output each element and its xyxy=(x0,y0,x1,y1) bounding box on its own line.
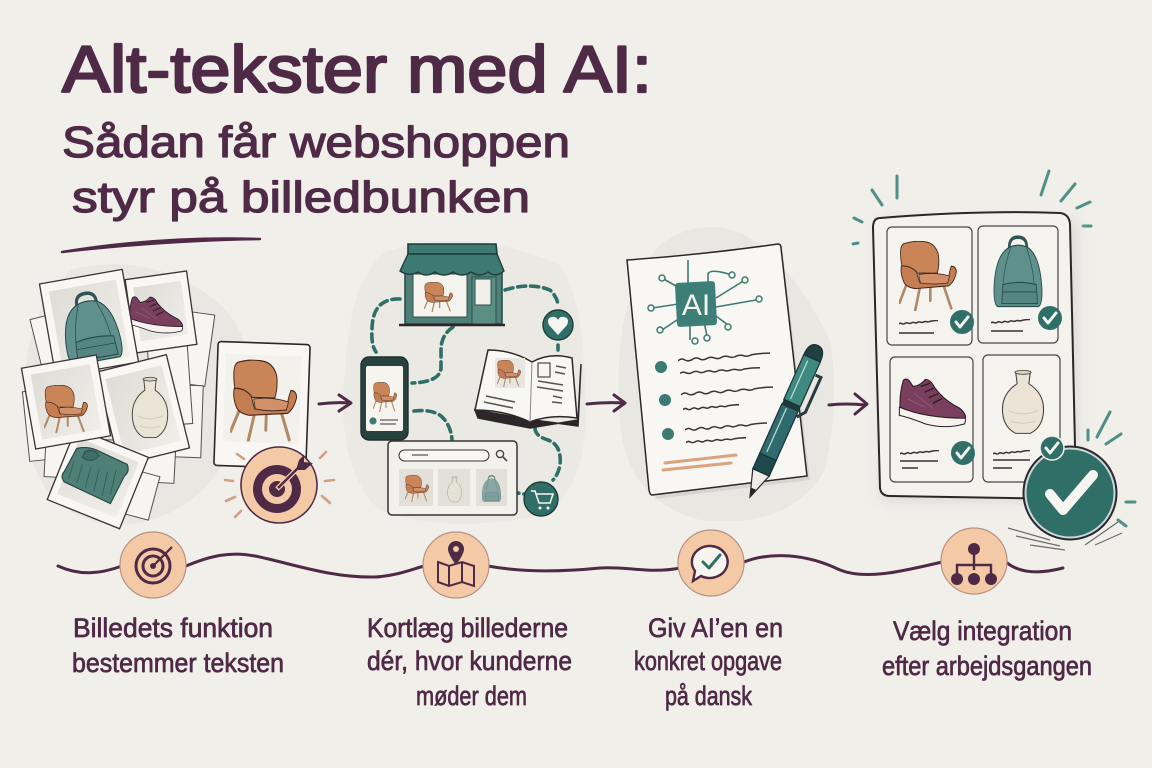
photo card: vase xyxy=(96,355,190,465)
caption 2: møder dem xyxy=(416,681,527,711)
caption 3: på dansk xyxy=(665,681,752,711)
arrow 1 xyxy=(319,395,351,411)
paper sheet xyxy=(655,246,810,499)
sweater xyxy=(62,447,128,504)
icon: search window xyxy=(388,441,517,515)
panel: photo pile xyxy=(21,264,248,529)
caption 2: Kortlæg billederne xyxy=(367,613,568,643)
caption 3: Giv AI’en en xyxy=(648,613,783,643)
photo card: backpack xyxy=(39,269,139,377)
AI chip xyxy=(648,260,762,344)
title: styr på billedbunken xyxy=(72,173,530,222)
timeline wave xyxy=(58,554,1063,577)
panel: AI brief on paper xyxy=(618,227,834,521)
caption 3 xyxy=(634,613,783,711)
step icon: hierarchy xyxy=(941,528,1007,594)
AI chip: AI xyxy=(682,289,710,322)
caption 1: bestemmer teksten xyxy=(72,648,284,678)
caption 1 xyxy=(72,613,284,678)
checklist xyxy=(655,353,773,470)
title: Sådan får webshoppen xyxy=(62,118,570,167)
icon: pen xyxy=(742,342,832,504)
product card: shoe xyxy=(890,357,973,482)
caption 3: konkret opgave xyxy=(634,646,782,676)
dashed routes xyxy=(372,286,560,494)
product card: chair xyxy=(887,227,972,345)
rays around tablet xyxy=(853,171,1091,244)
step icon: target xyxy=(120,532,186,598)
background cards xyxy=(22,310,215,520)
panel: customer touchpoints xyxy=(343,241,585,524)
caption 4: Vælg integration xyxy=(893,616,1072,646)
photo card: sweater xyxy=(47,428,148,529)
arrow 3 xyxy=(829,394,867,414)
icon: target badge xyxy=(225,447,334,523)
caption 2 xyxy=(367,613,572,711)
focus photo card with chair xyxy=(214,341,310,469)
icon: cart xyxy=(524,482,558,516)
photo card: shoe xyxy=(122,271,197,353)
caption 4: efter arbejdsgangen xyxy=(882,651,1092,681)
caption 4 xyxy=(882,616,1092,681)
product card: backpack xyxy=(978,226,1058,343)
icon: heart xyxy=(543,310,573,340)
title: Alt-tekster med AI: xyxy=(62,32,652,106)
title xyxy=(62,32,652,252)
photo card: chair xyxy=(21,355,111,449)
step icon: speech bubble check xyxy=(678,530,744,596)
panel: finished product tablet xyxy=(873,212,1078,502)
icon: open catalog book xyxy=(475,350,581,428)
icon: phone xyxy=(361,357,408,440)
caption 1: Billedets funktion xyxy=(73,613,273,643)
check badges xyxy=(950,306,1062,465)
icon: large check seal xyxy=(1008,412,1135,550)
caption 2: dér, hvor kunderne xyxy=(367,646,572,676)
product card: vase xyxy=(983,355,1060,482)
step icon: map pin xyxy=(423,532,489,598)
arrow 2 xyxy=(587,395,625,411)
icon: shop xyxy=(399,244,505,325)
